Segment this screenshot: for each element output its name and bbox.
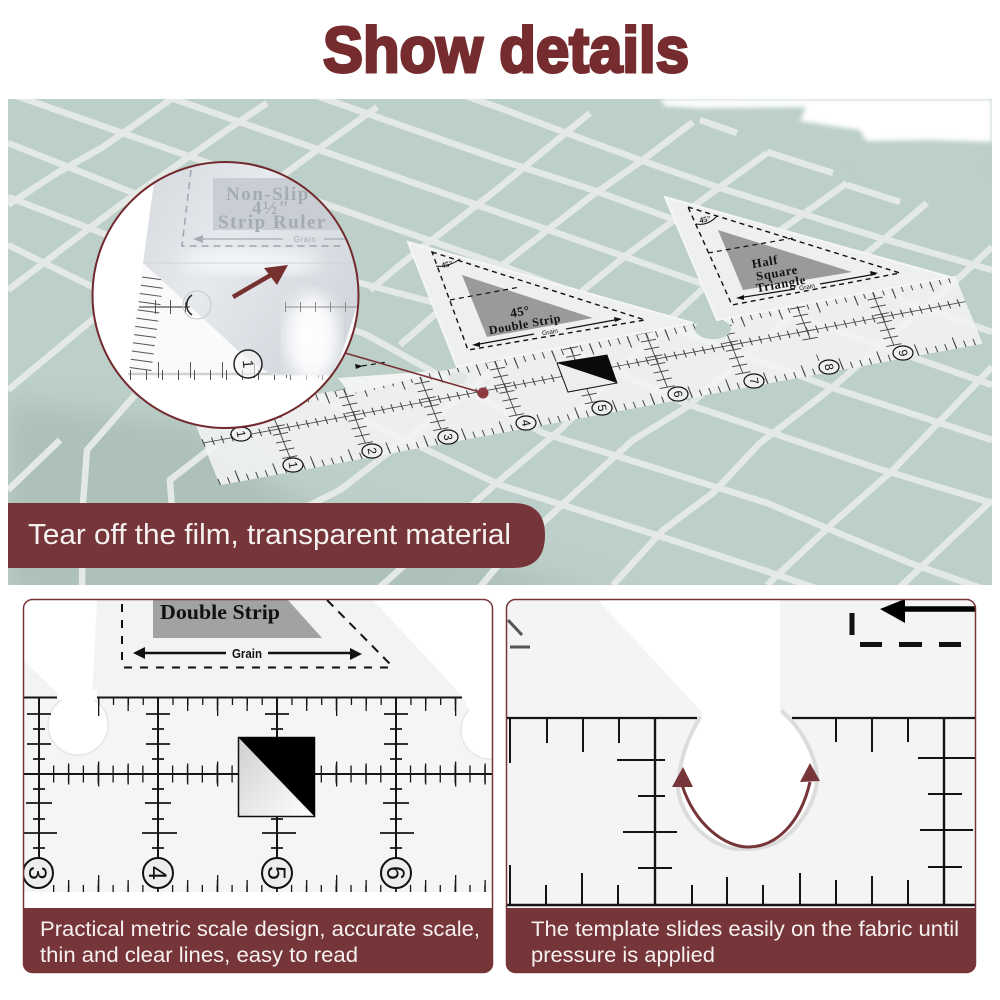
sliding arrow — [672, 763, 820, 847]
template: half square triangle — [665, 197, 950, 320]
dashes top left — [508, 620, 530, 647]
ruler notches — [449, 319, 731, 384]
magnifier callout: tear off film: Strip Ruler — [218, 212, 327, 233]
grain arrow top right — [880, 599, 976, 623]
caption band: The template slides easily on the fabric until — [531, 917, 959, 941]
template: 45 degree double strip — [408, 242, 693, 367]
ruler surface — [23, 697, 493, 892]
template: half square triangle: Grain — [799, 283, 816, 292]
number 1 in lens: 1 — [239, 359, 256, 369]
peeled film — [143, 160, 362, 375]
panel: metric scale — [23, 599, 519, 973]
caption band: pressure is applied — [531, 943, 715, 967]
fabric background — [8, 99, 992, 585]
template: half square triangle: Square — [755, 262, 799, 284]
fabric grid lines — [8, 99, 992, 585]
magnifier callout: tear off film: Grain — [294, 235, 316, 244]
grain arrow: Grain — [232, 646, 262, 661]
magnifier callout: tear off film — [92, 160, 362, 428]
magnifier callout: tear off film: 4½″ — [252, 198, 291, 219]
template: half square triangle: Triangle — [755, 273, 807, 295]
template: half square triangle: Half — [751, 253, 779, 271]
ruler numbers: 9 — [896, 348, 911, 358]
ruler numbers: 1 — [234, 429, 249, 439]
template: 45 degree double strip: 45° — [441, 259, 453, 270]
template: half square triangle: 45° — [699, 214, 711, 225]
panel: main photo — [8, 99, 992, 585]
half square block — [238, 738, 315, 817]
ruler on fabric — [192, 276, 983, 485]
grain arrow — [133, 647, 362, 660]
caption band: Practical metric scale design, accurate scale, — [40, 917, 480, 941]
number 1 in lens — [234, 350, 262, 378]
ruler numbers: 7 — [747, 376, 762, 386]
ruler under film — [128, 263, 362, 375]
template corner — [92, 599, 463, 697]
ruler numbers: 1 — [286, 460, 301, 470]
panel: metric scale: 6 — [381, 866, 409, 880]
caption band — [506, 908, 976, 973]
panel: metric scale: 4 — [143, 866, 171, 880]
banner: tear off the film: Tear off the film, transparent material — [28, 519, 511, 551]
ruler numbers: 8 — [822, 362, 837, 372]
scale lines and ticks — [507, 718, 976, 905]
strip label: Double Strip — [160, 600, 280, 624]
notches — [48, 695, 108, 755]
ruler numbers: 4 — [519, 418, 534, 428]
callout connector — [345, 353, 488, 398]
template: 45 degree double strip: 45° — [509, 302, 531, 321]
torn white area top right — [660, 99, 992, 142]
title: Show details — [323, 14, 689, 86]
caption band — [23, 908, 493, 973]
template: 45 degree double strip: Double Strip — [488, 311, 562, 337]
banner: tear off the film — [8, 503, 545, 568]
ruler numbers — [231, 346, 913, 472]
ruler body and scale — [192, 276, 983, 485]
strip ruler label — [213, 178, 343, 230]
panel: metric scale: 3 — [23, 866, 51, 880]
panel: metric scale: 5 — [262, 866, 290, 880]
scale ticks — [23, 697, 493, 888]
half square block — [557, 355, 617, 392]
magnifier callout: tear off film: Non-Slip — [226, 184, 310, 205]
template: 45 degree double strip: Grain — [542, 328, 559, 337]
ruler numbers: 2 — [365, 446, 380, 456]
caption band: thin and clear lines, easy to read — [40, 943, 358, 967]
ruler numbers: 5 — [595, 403, 610, 413]
dashed seam line — [852, 613, 961, 644]
notch white cutout — [597, 599, 815, 847]
scale numbers — [23, 858, 411, 888]
film edge template strip — [338, 362, 433, 394]
panel: template slides — [506, 599, 976, 973]
film peel arrow — [233, 265, 288, 297]
ruler numbers: 3 — [441, 432, 456, 442]
ruler numbers: 6 — [671, 389, 686, 399]
